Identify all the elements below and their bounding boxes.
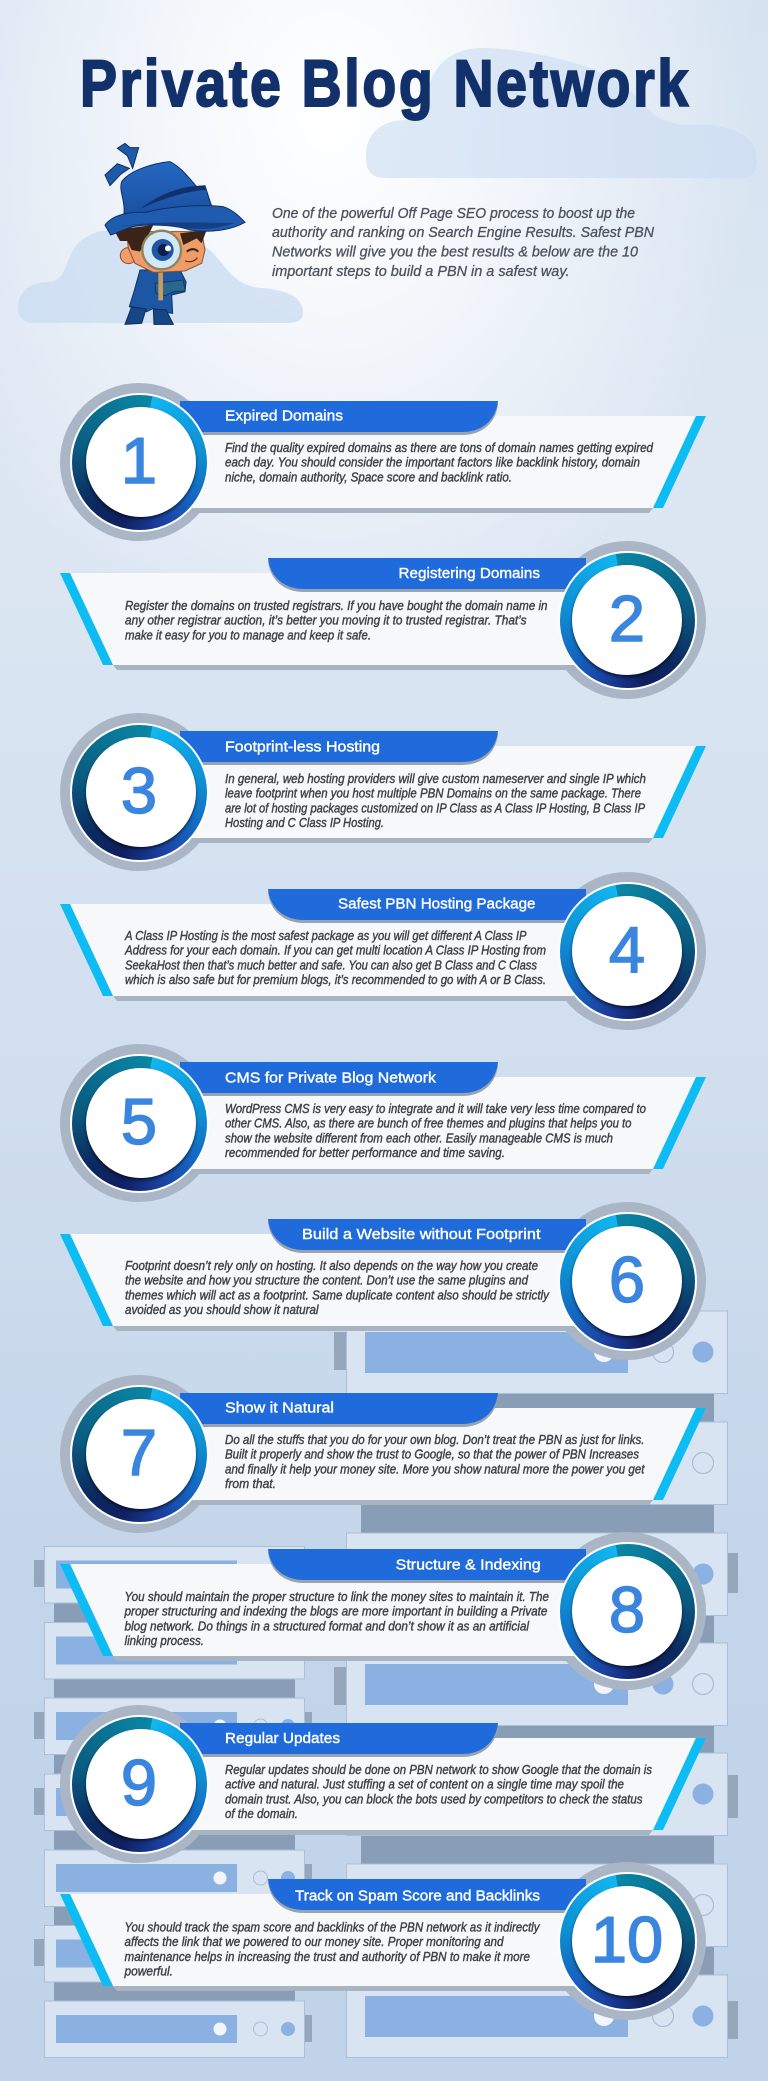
step 2: Registering Domains: Register the domains on trusted registrars. If you have bought the domain name in (125, 599, 548, 613)
step 6: Build a Website without Footprint: 6 (609, 1243, 645, 1316)
title: Private Blog Network (80, 46, 688, 120)
step 4: Safest PBN Hosting Package: 4 (609, 913, 645, 986)
intro text: One of the powerful Off Page SEO process to boost up the (272, 205, 635, 222)
step 4: Safest PBN Hosting Package: SeekaHost then that’s much better and safe. You can also get B Class and C Class (125, 958, 537, 972)
step 4: Safest PBN Hosting Package: Address for your each domain. If you can get multi location A Class IP Hosting from (124, 944, 546, 958)
step 9: Regular Updates (60, 1705, 706, 1863)
step 10: Track on Spam Score and Backlinks: You should track the spam score and backlinks of the PBN network as it indirectly (124, 1920, 540, 1934)
step 3: Footprint-less Hosting: leave footprint when you host multiple PBN Domains on the same package. There (225, 787, 641, 801)
step 7: Show it Natural (60, 1375, 706, 1533)
step 1: Expired Domains: niche, domain authority, Space score and backlink ratio. (225, 470, 512, 484)
step 9: Regular Updates: Regular Updates (225, 1730, 340, 1747)
step 2: Registering Domains (60, 541, 706, 699)
step 3: Footprint-less Hosting: are lot of hosting packages customized on IP Class as A Class IP Hosting, B Class IP (225, 801, 646, 815)
step 1: Expired Domains: 1 (121, 424, 157, 497)
step 8: Structure & Indexing: linking process. (124, 1634, 204, 1648)
step 7: Show it Natural: and finally it help your money site. More you show natural more the power you get (225, 1462, 645, 1476)
step 4: Safest PBN Hosting Package: which is also safe but for premium blogs, it’s recommended to go with A or B Class. (125, 973, 546, 987)
step 8: Structure & Indexing (60, 1532, 706, 1690)
step 7: Show it Natural: Show it Natural (225, 1400, 334, 1416)
step 6: Build a Website without Footprint: Build a Website without Footprint (302, 1226, 541, 1243)
step 5: CMS for Private Blog Network: CMS for Private Blog Network (225, 1070, 437, 1086)
step 6: Build a Website without Footprint (60, 1202, 706, 1360)
step 1: Expired Domains: each day. You should consider the important factors like backlink history, domain (225, 456, 640, 470)
step 3: Footprint-less Hosting: In general, web hosting providers will give custom nameserver and single IP which (225, 772, 646, 786)
step 10: Track on Spam Score and Backlinks: affects the link that we powered to our money site. Proper monitoring and (124, 1935, 504, 1949)
step 8: Structure & Indexing: blog network. Do things in a structured format and don’t show it as an artificial (124, 1619, 530, 1633)
step 5: CMS for Private Blog Network: WordPress CMS is very easy to integrate and it will take very less time compared to (225, 1102, 646, 1116)
step 6: Build a Website without Footprint: the website and how you structure the content. Don’t use the same plugins and (125, 1274, 529, 1288)
step 10: Track on Spam Score and Backlinks: Track on Spam Score and Backlinks (295, 1888, 540, 1904)
step 2: Registering Domains: any other registrar auction, it’s better you moving it to trusted registrar. That’s (125, 614, 526, 628)
step 4: Safest PBN Hosting Package (60, 872, 706, 1030)
step 7: Show it Natural: Do all the stuffs that you do for your own blog. Don’t treat the PBN as just for links. (225, 1433, 644, 1447)
step 7: Show it Natural: Built it properly and show the trust to Google, so that the power of PBN Increases (225, 1448, 639, 1462)
step 4: Safest PBN Hosting Package: Safest PBN Hosting Package (338, 896, 536, 912)
step 2: Registering Domains: Registering Domains (398, 565, 540, 582)
step 10: Track on Spam Score and Backlinks (60, 1862, 706, 2020)
step 4: Safest PBN Hosting Package: A Class IP Hosting is the most safest package as you will get different A Class IP (124, 929, 527, 943)
intro text: authority and ranking on Search Engine Results. Safest PBN (272, 224, 654, 241)
step 2: Registering Domains: 2 (609, 582, 645, 655)
step 8: Structure & Indexing: 8 (609, 1573, 645, 1646)
step 1: Expired Domains (60, 383, 706, 541)
step 10: Track on Spam Score and Backlinks: 10 (591, 1903, 663, 1976)
step 5: CMS for Private Blog Network (60, 1044, 706, 1202)
step 9: Regular Updates: 9 (121, 1746, 157, 1819)
step 9: Regular Updates: Regular updates should be done on PBN network to show Google that the domain is (225, 1763, 652, 1777)
step 6: Build a Website without Footprint: Footprint doesn’t rely only on hosting. It also depends on the way how you create (125, 1259, 538, 1273)
step 5: CMS for Private Blog Network: recommended for better performance and time saving. (225, 1146, 505, 1160)
icon: detective character with magnifying glass (104, 142, 246, 325)
step 5: CMS for Private Blog Network: show the website different from each other. Easily manageable CMS is much (225, 1131, 613, 1145)
step 2: Registering Domains: make it easy for you to manage and keep it safe. (125, 628, 371, 642)
step 3: Footprint-less Hosting: 3 (121, 754, 157, 827)
step 8: Structure & Indexing: You should maintain the proper structure to link the money sites to maintain it. The (124, 1590, 549, 1604)
step 10: Track on Spam Score and Backlinks: maintenance helps in increasing the trust and authority of PBN to make it more (124, 1950, 530, 1964)
step 7: Show it Natural: from that. (225, 1477, 276, 1491)
step 5: CMS for Private Blog Network: other CMS. Also, as there are bunch of free themes and plugins that helps you to (225, 1117, 632, 1131)
intro text (272, 205, 654, 280)
step 8: Structure & Indexing: Structure & Indexing (396, 1556, 541, 1574)
step 3: Footprint-less Hosting (60, 713, 706, 871)
step 9: Regular Updates: active and natural. Just stuffing a set of content on a single time may spoil the (225, 1778, 624, 1792)
step 7: Show it Natural: 7 (121, 1416, 157, 1489)
step 1: Expired Domains: Find the quality expired domains as there are tons of domain names getting expired (225, 441, 654, 455)
step 6: Build a Website without Footprint: avoided as you should show it natural (125, 1303, 320, 1317)
intro text: Networks will give you the best results & below are the 10 (272, 244, 639, 260)
step 9: Regular Updates: domain trust. Also, you can block the bots used by competitors to check the status (225, 1792, 642, 1806)
step 5: CMS for Private Blog Network: 5 (121, 1085, 157, 1158)
step 10: Track on Spam Score and Backlinks: powerful. (124, 1965, 173, 1979)
background clouds (18, 48, 757, 323)
step 9: Regular Updates: of the domain. (225, 1807, 298, 1821)
intro text: important steps to build a PBN in a safest way. (272, 263, 570, 280)
step 1: Expired Domains: Expired Domains (225, 408, 343, 424)
step 6: Build a Website without Footprint: themes which will act as a footprint. Same duplicate content also should be strictly (125, 1288, 550, 1302)
step 8: Structure & Indexing: proper structuring and indexing the blogs are more important in building a Private (124, 1605, 548, 1619)
right server column (334, 1311, 738, 2058)
step 3: Footprint-less Hosting: Footprint-less Hosting (225, 738, 380, 756)
step 3: Footprint-less Hosting: Hosting and C Class IP Hosting. (225, 816, 384, 830)
left server column (34, 1546, 312, 2058)
